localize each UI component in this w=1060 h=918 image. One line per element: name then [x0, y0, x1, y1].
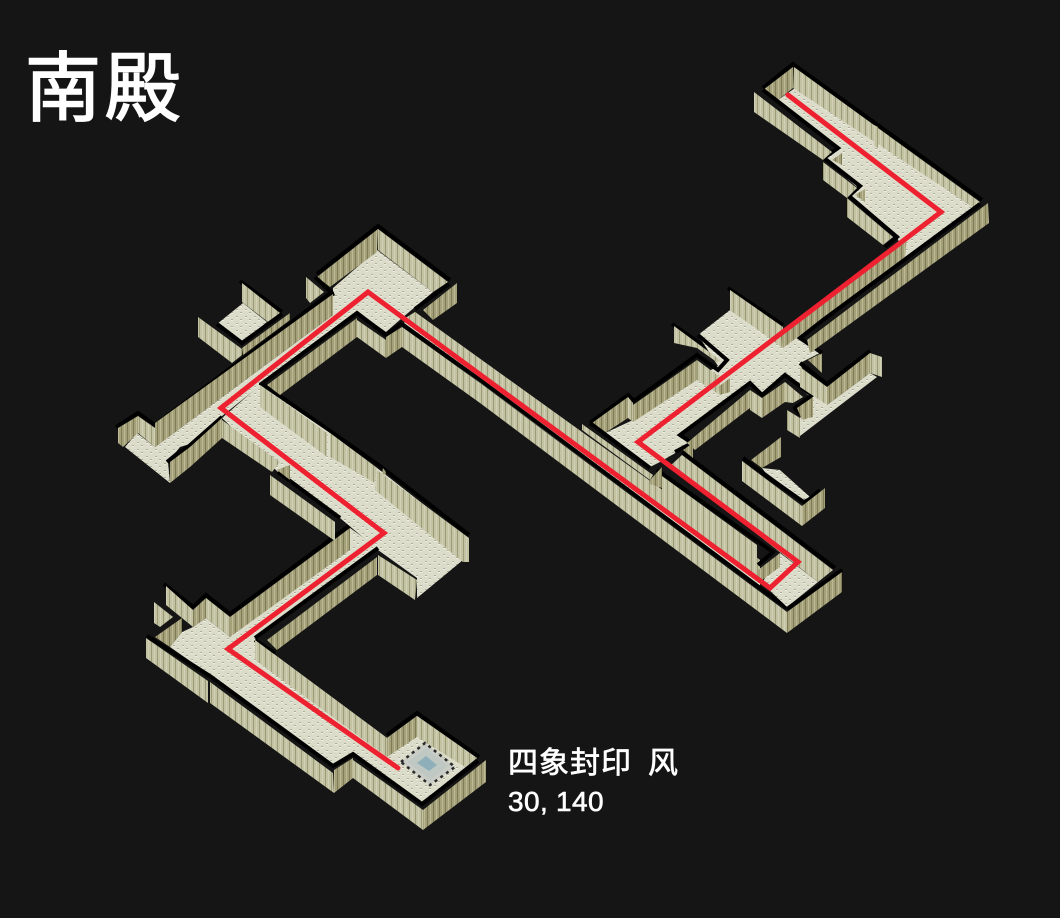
long north-east corridor walls: [780, 203, 989, 353]
map section: lower-left hall: [146, 528, 486, 830]
shrine room walls: [387, 716, 477, 767]
end room floor: [762, 553, 818, 607]
red route: [221, 95, 941, 768]
detached small room: [198, 283, 290, 363]
inner dark wall: [758, 553, 780, 583]
location name: 四象封印: [508, 747, 632, 780]
hall floor: [170, 528, 477, 802]
coordinates: 30,140: [508, 786, 604, 817]
hall floor: [605, 310, 820, 467]
connecting corridor walls: [230, 528, 387, 757]
map section: upper-left halls: [118, 229, 457, 483]
map section: central-right hall: [582, 290, 882, 582]
corridor upper wall: [402, 312, 760, 582]
top room and north-east corridor floor: [125, 250, 433, 483]
upper room walls: [590, 290, 783, 423]
corridor lower wall: [402, 327, 787, 633]
right arm floor: [800, 367, 877, 436]
hall lower walls: [222, 420, 417, 600]
back walls: [763, 67, 980, 207]
back-left walls: [592, 360, 730, 433]
corridor floor: [402, 312, 760, 590]
stepped left walls: [754, 90, 897, 247]
map section: central-left hall: [222, 385, 469, 600]
title: 南殿: [25, 47, 185, 132]
room walls: [751, 437, 781, 468]
end room front wall: [787, 572, 842, 633]
hall floor: [222, 385, 469, 598]
hall upper walls: [260, 385, 469, 562]
map section: long south-east corridor: [402, 312, 842, 633]
north-east corridor walls: [118, 294, 402, 483]
four symbols seal: [401, 743, 455, 785]
location label: [508, 747, 678, 817]
map section: detached south-east room: [742, 437, 825, 526]
lower walls: [675, 375, 813, 458]
back walls: [154, 586, 230, 647]
top room walls: [306, 229, 457, 320]
front walls: [146, 636, 486, 830]
wall top shadows: [116, 64, 982, 757]
map section: upper-right hall: [754, 67, 989, 353]
right arm walls: [800, 351, 882, 405]
room floor: [762, 468, 810, 500]
location label: 风: [648, 747, 678, 780]
south-east partition walls: [582, 423, 833, 582]
hall floor: [778, 88, 973, 257]
